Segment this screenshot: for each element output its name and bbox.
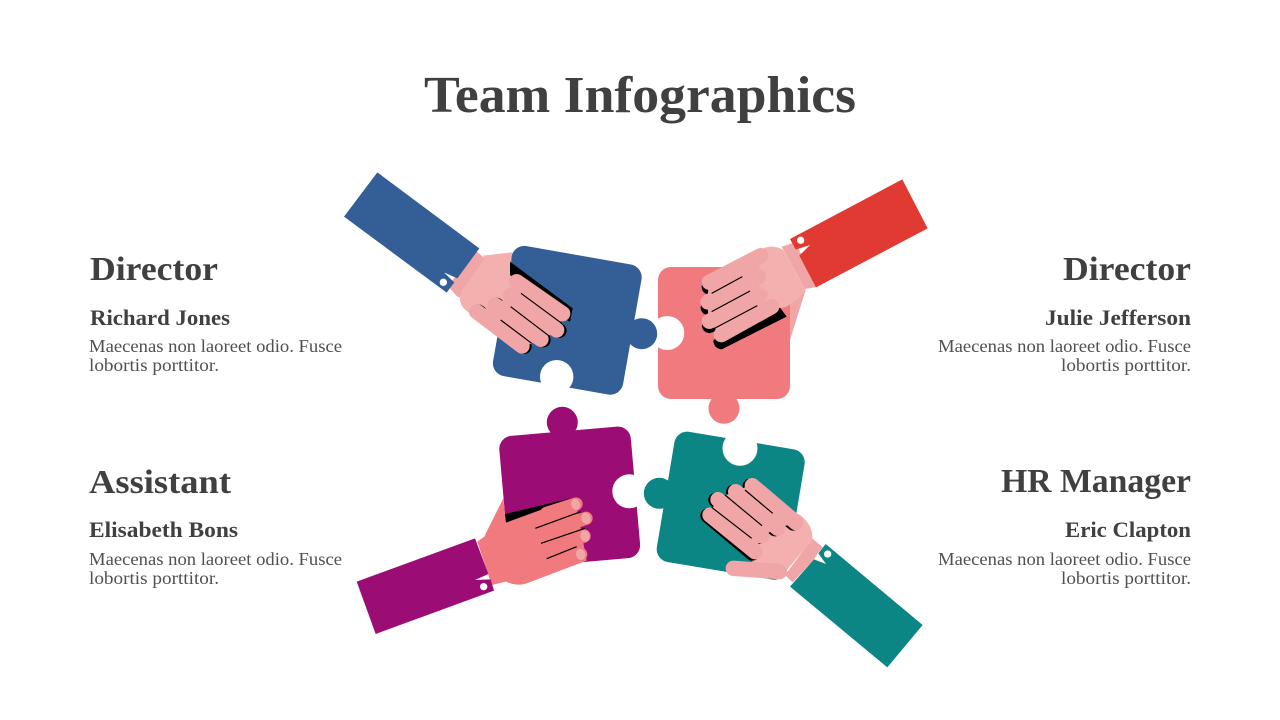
text block: HR Manager Eric Clapton: HR Manager — [1001, 463, 1191, 500]
hand and sleeve: purple — [357, 497, 592, 634]
text block: Director Julie Jefferson: Maecenas non laoreet odio. Fusce — [938, 336, 1191, 356]
text block: Assistant Elisabeth Bons — [89, 464, 342, 588]
puzzle piece: blue — [491, 244, 657, 397]
text block: HR Manager Eric Clapton: Maecenas non laoreet odio. Fusce — [938, 549, 1191, 569]
puzzle piece: teal — [644, 430, 807, 582]
text block: Assistant Elisabeth Bons: lobortis porttitor. — [89, 568, 219, 588]
text block: Assistant Elisabeth Bons: Elisabeth Bons — [89, 517, 238, 542]
puzzle piece: coral — [650, 267, 790, 424]
text block: Director Richard Jones: Richard Jones — [90, 305, 230, 330]
text block: Director Julie Jefferson: Julie Jefferson — [1045, 305, 1192, 330]
hand and sleeve: red — [707, 179, 928, 349]
hand and sleeve: blue — [344, 172, 573, 347]
text block: HR Manager Eric Clapton — [938, 463, 1191, 588]
text block: Director Julie Jefferson — [938, 251, 1192, 375]
text block: Director Richard Jones: Maecenas non laoreet odio. Fusce — [89, 336, 342, 356]
text block: Assistant Elisabeth Bons: Maecenas non laoreet odio. Fusce — [89, 549, 342, 569]
text block: Director Richard Jones — [89, 251, 342, 375]
text block: Assistant Elisabeth Bons: Assistant — [89, 464, 232, 501]
title: Team Infographics — [424, 67, 856, 124]
text block: HR Manager Eric Clapton: lobortis porttitor. — [1061, 568, 1191, 588]
hand and sleeve: teal — [708, 485, 923, 667]
text block: Director Julie Jefferson: lobortis porttitor. — [1061, 355, 1191, 375]
text block: Director Richard Jones: lobortis porttitor. — [89, 355, 219, 375]
text block: HR Manager Eric Clapton: Eric Clapton — [1065, 517, 1191, 542]
text block: Director Julie Jefferson: Director — [1063, 251, 1191, 288]
puzzle piece: purple — [498, 407, 646, 569]
text block: Director Richard Jones: Director — [90, 251, 218, 288]
